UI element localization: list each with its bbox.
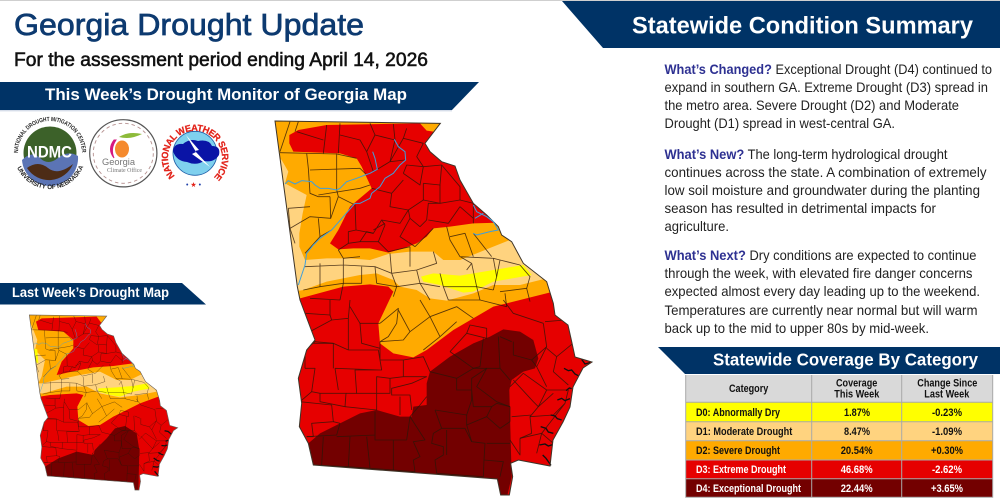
logo: Georgia Climate Office: [90, 120, 157, 187]
subtitle: assessment period: For the assessment period ending April 14, 2026: [14, 50, 428, 71]
row D2: D2: Severe Drought: [696, 445, 780, 457]
text block: what's next: back up to the mid to upper 80s by mid-week.: [664, 321, 929, 336]
row D4: [686, 479, 993, 497]
banner: statewide condition summary: [562, 1, 1000, 48]
table header row: This Week: [834, 389, 880, 401]
row D4: +3.65%: [931, 483, 963, 495]
D3 extreme drought: north: [289, 124, 494, 253]
last week state outline: [29, 315, 178, 490]
text block: what's new: season has resulted in detrimental impacts for: [664, 201, 936, 216]
D4 exceptional drought region: [293, 329, 538, 498]
last week county lines: [32, 315, 170, 481]
last week coastal marsh: [153, 431, 171, 476]
coastal marsh detail: [539, 359, 590, 465]
text block: what's changed: the metro area. Severe Drought (D2) and Moderate: [664, 98, 959, 113]
last week D0 west patch: [33, 348, 38, 363]
logo: National Weather Service: NATIONAL WEATHER SERVICE: [162, 124, 228, 182]
table header row: Category: [729, 383, 769, 395]
table header row: Coverage: [836, 378, 877, 390]
text block: what's next: What’s Next? Dry conditions are expected to continue: [664, 248, 976, 263]
text block: what's next: Temperatures are currently near normal but will warm: [664, 303, 978, 318]
last week D0 region: [98, 383, 150, 397]
text block: what's next: expected almost every day leading up to the weekend.: [664, 284, 980, 299]
county lines: [280, 122, 575, 477]
last week D1 region: [28, 318, 157, 397]
map: last week's drought map: [29, 314, 178, 490]
banner: statewide coverage by category: Statewide Coverage By Category: [713, 350, 978, 370]
logo: NDMC: NDMC: [27, 142, 72, 162]
row D2: 20.54%: [841, 445, 873, 457]
text block: what's next: through the week, with elevated fire danger concerns: [664, 266, 973, 281]
banner: statewide condition summary: Statewide Condition Summary: [632, 12, 974, 40]
text block: what's changed: [664, 62, 992, 131]
title: Georgia Drought Update: [14, 7, 364, 42]
row D4: D4: Exceptional Drought: [696, 483, 801, 495]
table header row: Change Since: [917, 378, 977, 390]
table: coverage by category: [686, 375, 993, 497]
logo: NDMC: UNIVERSITY OF NEBRASKA: [18, 166, 84, 190]
text block: what's new: low soil moisture and groundwater during the planting: [664, 183, 980, 198]
last week D3 base: [36, 315, 177, 490]
row D2: +0.30%: [931, 445, 963, 457]
map: this week's drought monitor of Georgia: [274, 120, 594, 496]
text block: what's changed: What’s Changed? Exceptional Drought (D4) continued to: [664, 62, 992, 77]
rivers: [285, 139, 498, 285]
banner: last week's map: [0, 283, 206, 304]
row D2: [686, 441, 993, 460]
row D1: 8.47%: [844, 426, 870, 438]
row D3: -2.62%: [932, 464, 962, 476]
row D1: D1: Moderate Drought: [696, 426, 793, 438]
row D1: -1.09%: [932, 426, 962, 438]
logo: National Weather Service: • ★ •: [186, 181, 202, 189]
row D3: D3: Extreme Drought: [696, 464, 786, 476]
last week D3 north: [36, 316, 132, 375]
text block: what's new: What’s New? The long-term hydrological drought: [664, 147, 948, 162]
text block: what's changed: Drought (D1) spread in west-central GA.: [664, 116, 895, 131]
D1 moderate drought region: [273, 152, 547, 301]
state outline: [275, 121, 592, 495]
top edge line: [0, 0, 1000, 1]
text block: what's next: [664, 248, 980, 336]
banner: statewide coverage by category: [658, 347, 1000, 374]
row D0: -0.23%: [932, 407, 962, 419]
text block: what's new: agriculture.: [664, 219, 729, 234]
last week D4 region: [45, 426, 140, 490]
last week rivers: [34, 324, 134, 392]
last week D2 region: [30, 315, 158, 426]
row D3: [686, 460, 993, 479]
logo: Georgia Climate Office: Climate Office: [107, 167, 142, 174]
text block: what's changed: expand in southern GA. Extreme Drought (D3) spread in: [664, 80, 988, 95]
banner: this week's map: This Week’s Drought Monitor of Georgia Map: [45, 85, 407, 104]
logo: NDMC: [14, 116, 86, 190]
text block: what's new: continues across the state. A combination of extremely: [664, 165, 987, 180]
table header row: Last Week: [924, 389, 970, 401]
row D0: D0: Abnormally Dry: [696, 407, 781, 419]
D0 abnormally dry region: [421, 265, 532, 293]
row D0: [686, 402, 993, 422]
row D4: 22.44%: [841, 483, 873, 495]
logo: Georgia Climate Office: Georgia: [102, 157, 136, 168]
table header row: [686, 375, 993, 402]
D2 severe drought region: [276, 122, 550, 358]
banner: this week's map: [0, 82, 479, 111]
D3 base region: [298, 284, 591, 494]
row D0: 1.87%: [844, 407, 870, 419]
text block: what's new: [664, 147, 987, 234]
logo: NDMC: NATIONAL DROUGHT MITIGATION CENTER: [14, 116, 86, 153]
banner: last week's map: Last Week’s Drought Map: [12, 285, 169, 300]
row D1: [686, 422, 993, 441]
row D3: 46.68%: [841, 464, 873, 476]
